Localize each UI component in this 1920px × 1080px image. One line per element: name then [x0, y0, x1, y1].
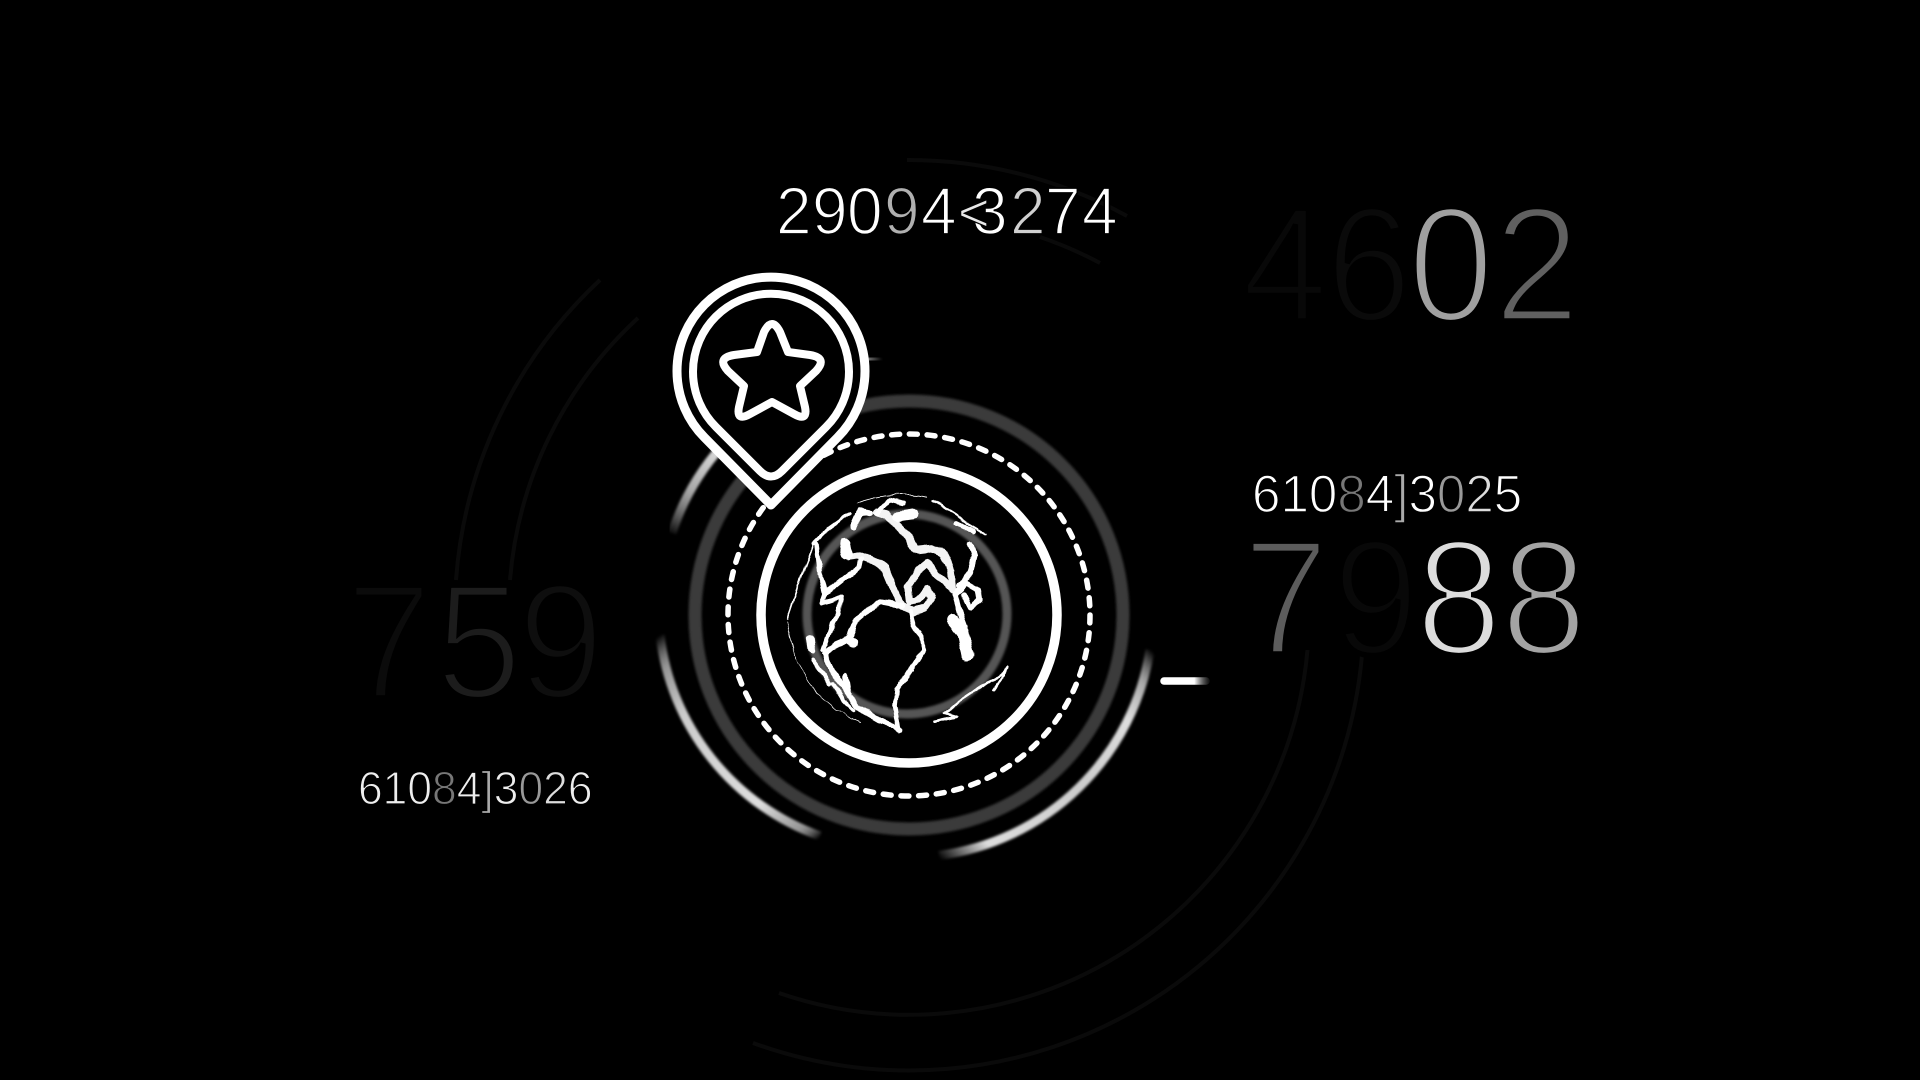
big number 7988: 8 [1501, 506, 1587, 689]
big faded number 759: 7 [346, 550, 432, 733]
label 29094<3274: 2 [1010, 174, 1046, 248]
label 29094<3274: 2 [776, 174, 812, 248]
big faded number 759 [346, 550, 604, 733]
inner white ring [761, 467, 1057, 763]
outer bright arc: bottom left [660, 635, 820, 836]
label 29094<3274: 9 [884, 174, 920, 248]
icon: location pin with star [677, 277, 865, 505]
big number 4602: 0 [1408, 173, 1494, 356]
outer bright arc: top left [672, 446, 722, 533]
label 29094<3274: 4 [1082, 174, 1118, 248]
star [723, 324, 821, 417]
radial rings around globe [660, 358, 1150, 856]
big number 7988: 8 [1416, 506, 1502, 689]
big number 7988: 9 [1333, 506, 1419, 689]
label 61084]3025: 61084]3025 [1252, 465, 1522, 524]
faint background arcs [456, 160, 1362, 1070]
outer arc stub [866, 358, 882, 360]
label 29094<3274 [776, 174, 1118, 248]
dashed ring [728, 434, 1090, 796]
big number 4602: 4 [1242, 173, 1328, 356]
label 61084]3026: 61084]3026 [358, 762, 593, 814]
label 29094<3274: 9 [812, 174, 848, 248]
big number 7988: 7 [1243, 506, 1329, 689]
outer bright arc: bottom right [939, 650, 1150, 856]
tick mark [1164, 677, 1206, 685]
label 29094<3274: 3 [972, 174, 1008, 248]
big faded number 759: 9 [518, 550, 604, 733]
grey ring [695, 401, 1123, 829]
big number 4602: 2 [1494, 173, 1580, 356]
big number 4602 [1242, 173, 1580, 356]
label 29094<3274: < [958, 183, 990, 243]
big number 7988 [1243, 506, 1587, 689]
icon: globe continents [787, 494, 1008, 730]
label 29094<3274: 4 [921, 174, 957, 248]
big number 4602: 6 [1326, 173, 1412, 356]
big faded number 759: 5 [436, 550, 522, 733]
globe inner grey ring [807, 514, 1007, 714]
label 29094<3274: 7 [1045, 174, 1081, 248]
pin inner outline [693, 294, 849, 476]
pin outer outline [677, 277, 865, 505]
label 29094<3274: 0 [847, 174, 883, 248]
